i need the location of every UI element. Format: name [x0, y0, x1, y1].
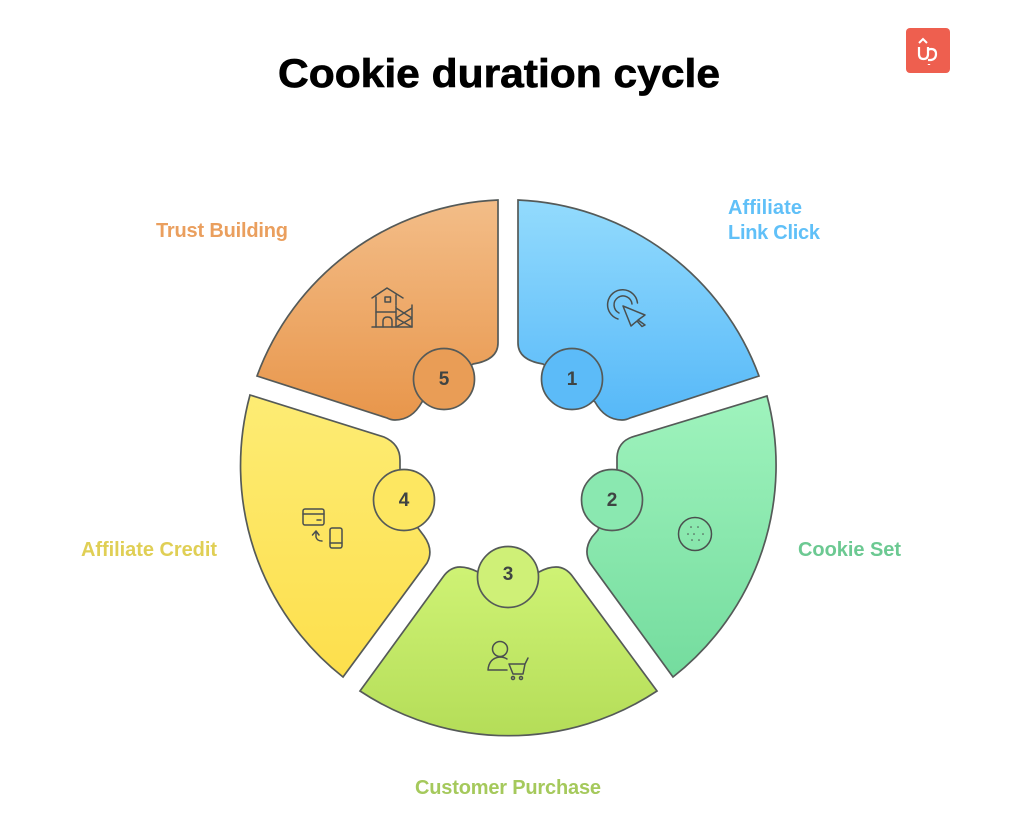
- label: Affiliate Link Click: Affiliate: [728, 197, 802, 219]
- label: Cookie Set: Cookie Set: [798, 539, 901, 561]
- icon: customer and cart: [488, 642, 528, 680]
- segment 3 shape: [360, 567, 657, 736]
- label: Trust Building: Trust Building: [156, 220, 288, 242]
- badge 3: 3: [503, 564, 513, 585]
- segment 4: Affiliate Credit: [241, 395, 434, 677]
- label: Affiliate Link Click: Link Click: [728, 222, 821, 244]
- segment 5: Trust Building: [257, 200, 498, 420]
- icon: card and phone: [303, 509, 342, 548]
- badge 2: 2: [607, 490, 617, 511]
- label: Affiliate Credit: Affiliate Credit: [81, 539, 217, 561]
- icon: house under construction: [372, 288, 412, 327]
- badge 3: [478, 546, 538, 608]
- segment 2: Cookie Set: [582, 396, 776, 677]
- segment 2 shape: [587, 396, 776, 677]
- badge 2: [582, 470, 642, 530]
- segment 3: Customer Purchase: [360, 546, 657, 736]
- badge 4: [374, 470, 434, 530]
- badge 5: [414, 348, 474, 410]
- segment 1 shape: [518, 200, 759, 420]
- title: Cookie duration cycle: [278, 52, 720, 96]
- badge 1: 1: [567, 369, 578, 390]
- icon: cursor click: [608, 290, 645, 326]
- badge 4: 4: [399, 490, 410, 511]
- segment 5 shape: [257, 200, 498, 420]
- icon: cookie: [678, 518, 712, 550]
- label: Customer Purchase: Customer Purchase: [415, 777, 601, 799]
- badge 1: [542, 348, 602, 410]
- segment 4 shape: [241, 395, 430, 677]
- badge 5: 5: [439, 369, 450, 390]
- segment 1: Affiliate Link Click: [518, 200, 759, 420]
- logo: [906, 28, 950, 73]
